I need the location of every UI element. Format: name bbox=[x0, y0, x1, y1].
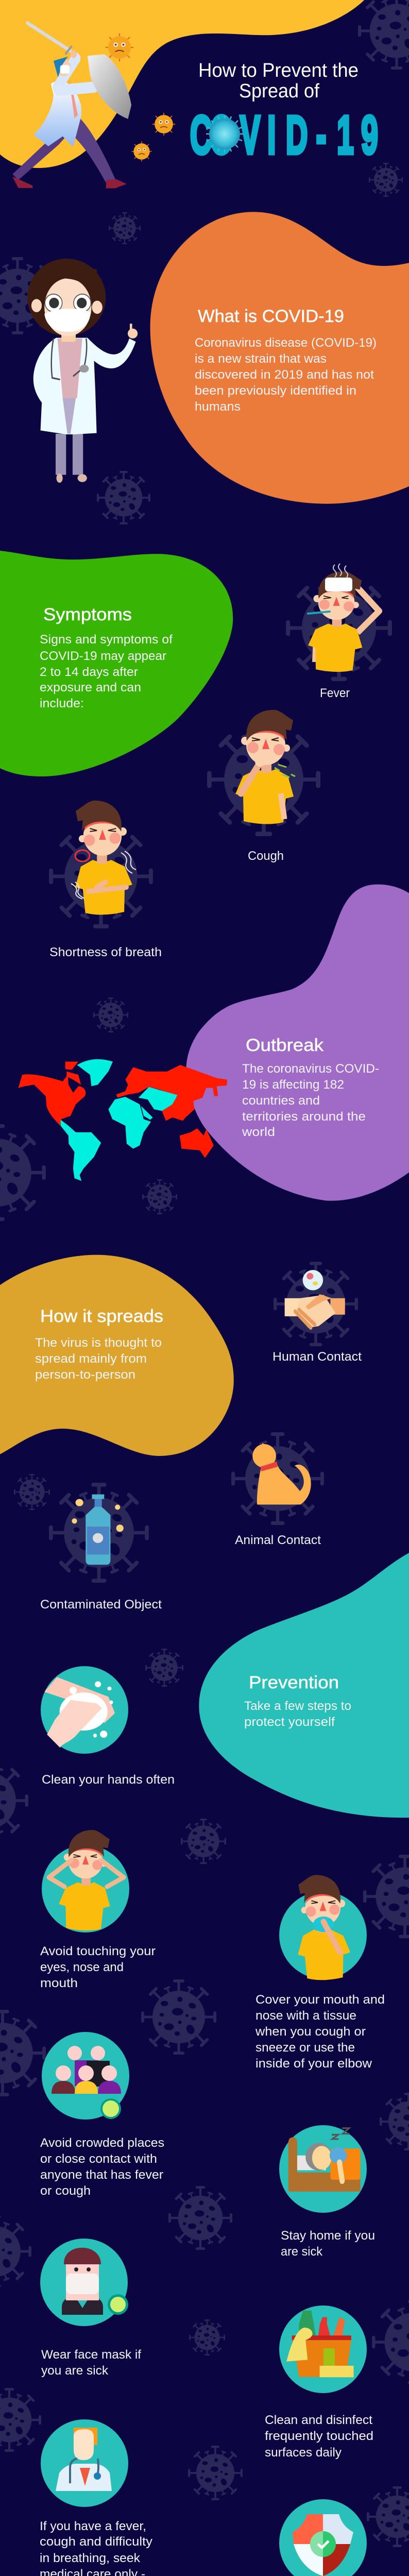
heading and text: symptoms: Symptoms bbox=[43, 605, 132, 624]
text: seek medical care bbox=[40, 2519, 153, 2576]
text: stay home: Stay home if you bbox=[281, 2229, 375, 2243]
heading and text: symptoms: COVID-19 may appear bbox=[40, 649, 166, 663]
label: clean hands: Clean your hands often bbox=[42, 1773, 175, 1787]
text: seek medical care: cough and difficulty bbox=[40, 2535, 153, 2549]
heading and text: what is covid: Coronavirus disease (COVID-19) bbox=[195, 336, 377, 350]
text: stay home bbox=[281, 2229, 375, 2259]
text: cover your mouth: when you cough or bbox=[255, 2025, 366, 2039]
icon: trusted source shield bbox=[279, 2499, 367, 2576]
icon: avoid touching face bbox=[42, 1830, 129, 1933]
heading and text: symptoms bbox=[40, 605, 173, 710]
icon: human contact handshake bbox=[274, 1262, 358, 1346]
heading and text: how it spreads: The virus is thought to bbox=[35, 1336, 162, 1350]
heading and text: outbreak: countries and bbox=[242, 1094, 320, 1108]
icon: orange virus three bbox=[132, 141, 151, 162]
label: fever: Fever bbox=[320, 686, 350, 700]
blob: prevention teal bbox=[199, 1553, 409, 1818]
label: cough: Cough bbox=[248, 849, 284, 863]
heading and text: outbreak: world bbox=[242, 1125, 275, 1139]
heading and text: symptoms: include: bbox=[40, 697, 84, 710]
heading and text: outbreak bbox=[242, 1036, 379, 1139]
heading and text: symptoms: exposure and can bbox=[40, 681, 141, 694]
label: contaminated object: Contaminated Object bbox=[40, 1598, 162, 1612]
icon: washing hands bbox=[41, 1666, 128, 1754]
text: stay home: are sick bbox=[281, 2245, 323, 2259]
text: avoid touching bbox=[40, 1944, 156, 1990]
text: clean and disinfect: frequently touched bbox=[265, 2429, 373, 2443]
heading and text: prevention: Take a few steps to bbox=[244, 1699, 351, 1713]
heading and text: how it spreads: How it spreads bbox=[40, 1307, 163, 1326]
heading and text: outbreak: 19 is affecting 182 bbox=[242, 1078, 344, 1092]
icon: orange virus one bbox=[106, 33, 133, 61]
heading and text: what is covid: discovered in 2019 and has not bbox=[195, 368, 374, 382]
heading and text: symptoms: Signs and symptoms of bbox=[40, 633, 173, 647]
heading and text: how it spreads: person-to-person bbox=[35, 1368, 135, 1382]
icon: blue coronavirus ball bbox=[206, 115, 243, 152]
text: clean and disinfect bbox=[265, 2413, 373, 2460]
text: cover your mouth bbox=[255, 1993, 385, 2071]
text: avoid touching: mouth bbox=[40, 1976, 78, 1990]
heading and text: outbreak: Outbreak bbox=[246, 1036, 324, 1055]
icon: crowd avoidance bbox=[42, 2032, 129, 2120]
title: COVID-19 lettering: COVID-19 bbox=[190, 105, 378, 165]
icon: fever boy bbox=[286, 564, 392, 681]
heading and text: symptoms: 2 to 14 days after bbox=[40, 665, 138, 679]
icon: animal contact cat bbox=[231, 1432, 324, 1525]
text: wear mask bbox=[41, 2348, 141, 2378]
heading and text: how it spreads: spread mainly from bbox=[35, 1352, 147, 1366]
icon: medical doctor bbox=[41, 2419, 128, 2507]
icon: shortness of breath boy bbox=[49, 801, 153, 928]
blob: what is covid orange bbox=[150, 212, 409, 504]
text: seek medical care: in breathing, seek bbox=[40, 2551, 141, 2565]
label: animal contact: Animal Contact bbox=[235, 1533, 321, 1547]
heading and text: what is covid: been previously identified in bbox=[195, 384, 356, 398]
icon: face mask bbox=[40, 2239, 128, 2326]
title: how to prevent bbox=[198, 60, 359, 102]
text: cover your mouth: inside of your elbow bbox=[255, 2057, 372, 2071]
text: seek medical care: If you have a fever, bbox=[40, 2519, 146, 2533]
text: cover your mouth: sneeze or use the bbox=[255, 2041, 355, 2055]
text: wear mask: Wear face mask if bbox=[41, 2348, 141, 2362]
title: how to prevent: How to Prevent the bbox=[198, 60, 359, 81]
blob: yellow header bbox=[0, 0, 364, 168]
blob: outbreak purple bbox=[186, 885, 409, 1201]
heading and text: what is covid: humans bbox=[195, 400, 241, 414]
text: clean and disinfect: surfaces daily bbox=[265, 2446, 342, 2460]
icon: contaminated bottle bbox=[49, 1483, 149, 1583]
text: avoid crowded places: or cough bbox=[40, 2184, 91, 2198]
icon: cover your mouth bbox=[279, 1875, 367, 1980]
heading and text: prevention: Prevention bbox=[249, 1673, 339, 1692]
heading and text: prevention bbox=[244, 1673, 351, 1729]
world map bbox=[18, 1059, 227, 1181]
title: how to prevent: Spread of bbox=[239, 80, 319, 102]
icon: orange virus two bbox=[152, 113, 175, 135]
icon: stay home in bed bbox=[279, 2125, 367, 2213]
icon: cough boy bbox=[207, 710, 320, 836]
text: clean and disinfect: Clean and disinfect bbox=[265, 2413, 372, 2427]
text: cover your mouth: Cover your mouth and bbox=[255, 1993, 385, 2007]
heading and text: outbreak: territories around the bbox=[242, 1110, 366, 1124]
label: shortness of breath: Shortness of breath bbox=[49, 945, 162, 959]
text: avoid crowded places bbox=[40, 2136, 164, 2198]
text: wear mask: you are sick bbox=[41, 2364, 109, 2378]
blob: symptoms green bbox=[0, 551, 233, 776]
icon: cleaning supplies bbox=[279, 2306, 367, 2393]
label: human contact: Human Contact bbox=[272, 1350, 362, 1364]
heading and text: outbreak: The coronavirus COVID- bbox=[242, 1062, 379, 1076]
text: avoid touching: Avoid touching your bbox=[40, 1944, 156, 1958]
text: avoid crowded places: Avoid crowded places bbox=[40, 2136, 164, 2150]
illustration: doctor with sword and shield bbox=[12, 23, 131, 188]
text: avoid touching: eyes, nose and bbox=[40, 1960, 124, 1974]
heading and text: what is covid: What is COVID-19 bbox=[198, 307, 344, 326]
text: avoid crowded places: or close contact with bbox=[40, 2152, 157, 2166]
illustration: female doctor bbox=[27, 259, 138, 483]
heading and text: what is covid: is a new strain that was bbox=[195, 352, 327, 366]
heading and text: prevention: protect yourself bbox=[244, 1715, 335, 1729]
text: cover your mouth: nose with a tissue bbox=[255, 2009, 356, 2023]
heading and text: how it spreads bbox=[35, 1307, 163, 1382]
text: avoid crowded places: anyone that has fever bbox=[40, 2168, 163, 2182]
blob: how it spreads gold bbox=[0, 1255, 234, 1456]
heading and text: what is covid bbox=[195, 307, 377, 414]
